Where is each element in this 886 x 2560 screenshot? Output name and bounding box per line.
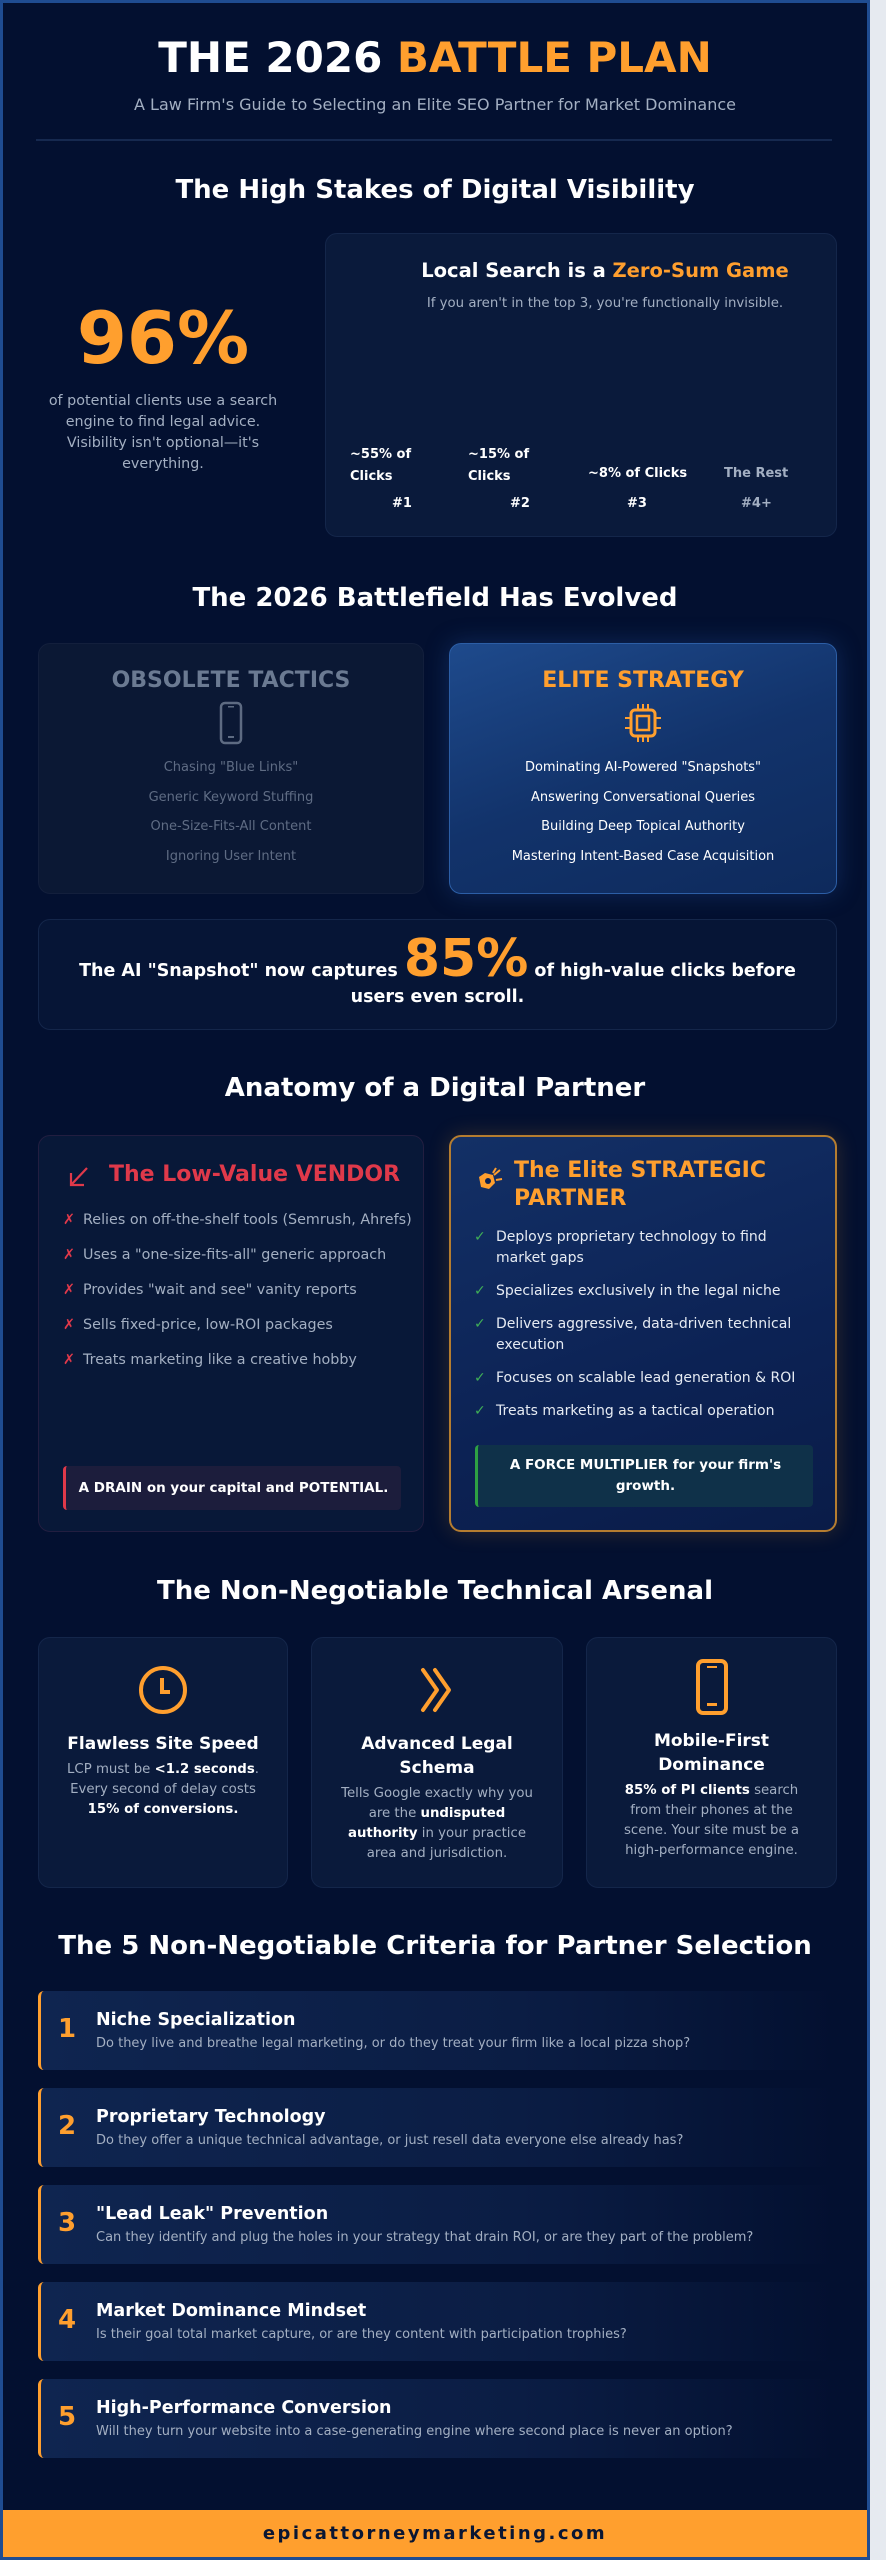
stat: 96%: 96%: [77, 296, 249, 380]
rank labels: Clicks: [468, 469, 511, 484]
panel: legal schema: Tells Google exactly why you are the undisputed authority in your practice area and jurisdiction.: [341, 1786, 533, 1861]
callout: force multiplier: growth.: [616, 1478, 675, 1494]
partner list: ✓: [474, 1229, 486, 1245]
callout: force multiplier: [475, 1445, 813, 1507]
panel: site speed: Flawless Site Speed: [67, 1734, 259, 1754]
panel: mobile-first: Mobile-First: [654, 1731, 769, 1751]
panel: obsolete tactics: One-Size-Fits-All Content: [151, 819, 311, 834]
panel: elite strategy: Dominating AI-Powered "Snapshots": [525, 760, 761, 775]
vendor list: ✗: [63, 1282, 75, 1298]
rank labels: Clicks: [350, 469, 393, 484]
panel: mobile-first: Dominance: [658, 1755, 765, 1775]
partner list: ✓: [474, 1370, 486, 1386]
criterion 2: [38, 2088, 837, 2167]
criterion 3: 3: [58, 2208, 76, 2238]
rank labels: #1: [392, 496, 412, 511]
vendor list: Uses a "one-size-fits-all" generic approach: [83, 1247, 386, 1263]
partner list: ✓: [474, 1316, 486, 1332]
criterion 3: [38, 2185, 837, 2264]
panel: obsolete tactics: Chasing "Blue Links": [164, 760, 298, 775]
vendor list: Treats marketing like a creative hobby: [83, 1352, 357, 1368]
panel: mobile-first: 85% of PI clients search from their phones at the scene. Your site must be a high-performance engine.: [624, 1783, 799, 1858]
panel: low-value vendor: [38, 1135, 424, 1532]
panel: legal schema: [311, 1637, 563, 1888]
panel: mobile-first: [586, 1637, 837, 1888]
criteria list: [38, 1991, 753, 2458]
vendor list: ✗: [63, 1212, 75, 1228]
panel: elite partner: [449, 1135, 837, 1532]
vendor heading: The Low-Value VENDOR: [109, 1162, 400, 1187]
rank labels: ~15% of: [468, 447, 529, 462]
partner list: Deploys proprietary technology to find market gaps: [496, 1229, 767, 1266]
vendor list: ✗: [63, 1317, 75, 1333]
callout: 85%: The AI "Snapshot" now captures 85% of high-value clicks before: [79, 929, 796, 989]
panel: obsolete tactics: Ignoring User Intent: [166, 848, 296, 864]
criterion 5: [38, 2379, 837, 2458]
panel: elite strategy: Answering Conversational Queries: [531, 790, 755, 804]
rank labels: #4+: [741, 496, 772, 511]
panel heading: Local Search is a Zero-Sum Game: [421, 259, 789, 282]
heading: 5 criteria: The 5 Non-Negotiable Criteria for Partner Selection: [58, 1931, 812, 1961]
callout: drain: A DRAIN on your capital and POTENTIAL.: [79, 1480, 388, 1496]
heading: anatomy: Anatomy of a Digital Partner: [225, 1073, 645, 1103]
callout: drain: [63, 1466, 401, 1510]
panel: legal schema: Advanced Legal: [361, 1734, 513, 1754]
panel: legal schema: Schema: [399, 1758, 475, 1778]
panel: zero-sum game: [325, 233, 837, 537]
criterion 1: Do they live and breathe legal marketing, or do they treat your firm like a local pizza shop?: [96, 2036, 690, 2051]
vendor list: Sells fixed-price, low-ROI packages: [83, 1317, 333, 1333]
criterion 3: Can they identify and plug the holes in your strategy that drain ROI, or are they part of the problem?: [96, 2230, 753, 2245]
partner list: ✓: [474, 1403, 486, 1419]
icon: down arrow: [70, 1167, 88, 1186]
icon: phone: [220, 702, 242, 744]
stat: 96%: of potential clients use a search engine to find legal advice. Visibility isn't optional—it's everything.: [49, 393, 277, 472]
panel: elite strategy: Building Deep Topical Authority: [541, 819, 745, 834]
rank labels: The Rest: [724, 466, 788, 481]
criterion 2: Proprietary Technology: [96, 2107, 326, 2127]
partner list: Specializes exclusively in the legal niche: [496, 1283, 781, 1299]
rank labels: #2: [510, 496, 530, 511]
criterion 5: Will they turn your website into a case-generating engine where second place is never an option?: [96, 2424, 733, 2439]
panel: site speed: LCP must be <1.2 seconds. Every second of delay costs 15% of conversions.: [67, 1762, 259, 1817]
panel: obsolete tactics: OBSOLETE TACTICS: [112, 668, 350, 693]
vendor list: Relies on off-the-shelf tools (Semrush, Ahrefs): [83, 1212, 412, 1228]
partner heading: PARTNER: [514, 1186, 626, 1211]
panel: elite strategy: ELITE STRATEGY: [542, 668, 744, 693]
icon: phone: [696, 1659, 728, 1715]
criterion 2: 2: [58, 2111, 76, 2141]
heading: battlefield: The 2026 Battlefield Has Evolved: [192, 583, 678, 613]
criterion 1: Niche Specialization: [96, 2010, 295, 2030]
panel: elite strategy: [449, 643, 837, 894]
partner list: Delivers aggressive, data-driven technical execution: [496, 1316, 791, 1353]
heading: technical arsenal: The Non-Negotiable Technical Arsenal: [157, 1576, 713, 1606]
footer: [3, 2510, 867, 2557]
rank labels: ~55% of: [350, 447, 411, 462]
partner heading: [514, 1158, 766, 1211]
criterion 2: Do they offer a unique technical advantage, or just resell data everyone else already has?: [96, 2133, 683, 2148]
footer: epicattorneymarketing.com: [263, 2523, 607, 2544]
partner list: ✓: [474, 1283, 486, 1299]
callout: force multiplier: A FORCE MULTIPLIER for your firm's: [510, 1457, 781, 1473]
rank labels: #3: [627, 496, 647, 511]
criterion 5: 5: [58, 2402, 76, 2432]
heading: high stakes: The High Stakes of Digital Visibility: [175, 175, 695, 205]
title: THE 2026 BATTLE PLAN: [158, 33, 712, 82]
vendor list: ✗: [63, 1247, 75, 1263]
rank labels: [350, 447, 788, 511]
vendor list: ✗: [63, 1352, 75, 1368]
partner list: Focuses on scalable lead generation & ROI: [496, 1370, 795, 1386]
partner list: [474, 1229, 795, 1419]
criterion 4: Is their goal total market capture, or are they content with participation trophies?: [96, 2327, 627, 2342]
vendor list: Provides "wait and see" vanity reports: [83, 1282, 357, 1298]
criterion 4: 4: [58, 2305, 76, 2335]
criterion 3: "Lead Leak" Prevention: [96, 2204, 328, 2224]
icon: clock: [139, 1666, 187, 1714]
panel: site speed: [38, 1637, 288, 1888]
callout: 85%: [38, 919, 837, 1030]
panel subtitle: If you aren't in the top 3, you're functionally invisible.: [427, 296, 783, 311]
criterion 4: Market Dominance Mindset: [96, 2301, 366, 2321]
subtitle: A Law Firm's Guide to Selecting an Elite SEO Partner for Market Dominance: [134, 95, 736, 114]
vendor list: [63, 1212, 412, 1368]
criterion 4: [38, 2282, 837, 2361]
criterion 5: High-Performance Conversion: [96, 2398, 391, 2418]
icon: chip: [625, 704, 661, 742]
icon: plug: [479, 1168, 502, 1189]
panel: elite strategy: Mastering Intent-Based Case Acquisition: [512, 848, 774, 864]
partner list: Treats marketing as a tactical operation: [496, 1403, 774, 1419]
criterion 1: [38, 1991, 837, 2070]
stat: 96%: [49, 296, 277, 472]
icon: chevrons: [420, 1668, 451, 1712]
callout: 85%: users even scroll.: [351, 987, 524, 1007]
criterion 1: 1: [58, 2014, 76, 2044]
rank labels: ~8% of Clicks: [588, 466, 687, 481]
panel: obsolete tactics: Generic Keyword Stuffing: [149, 790, 313, 804]
panel: obsolete tactics: [38, 643, 424, 894]
partner heading: The Elite STRATEGIC: [514, 1158, 766, 1183]
